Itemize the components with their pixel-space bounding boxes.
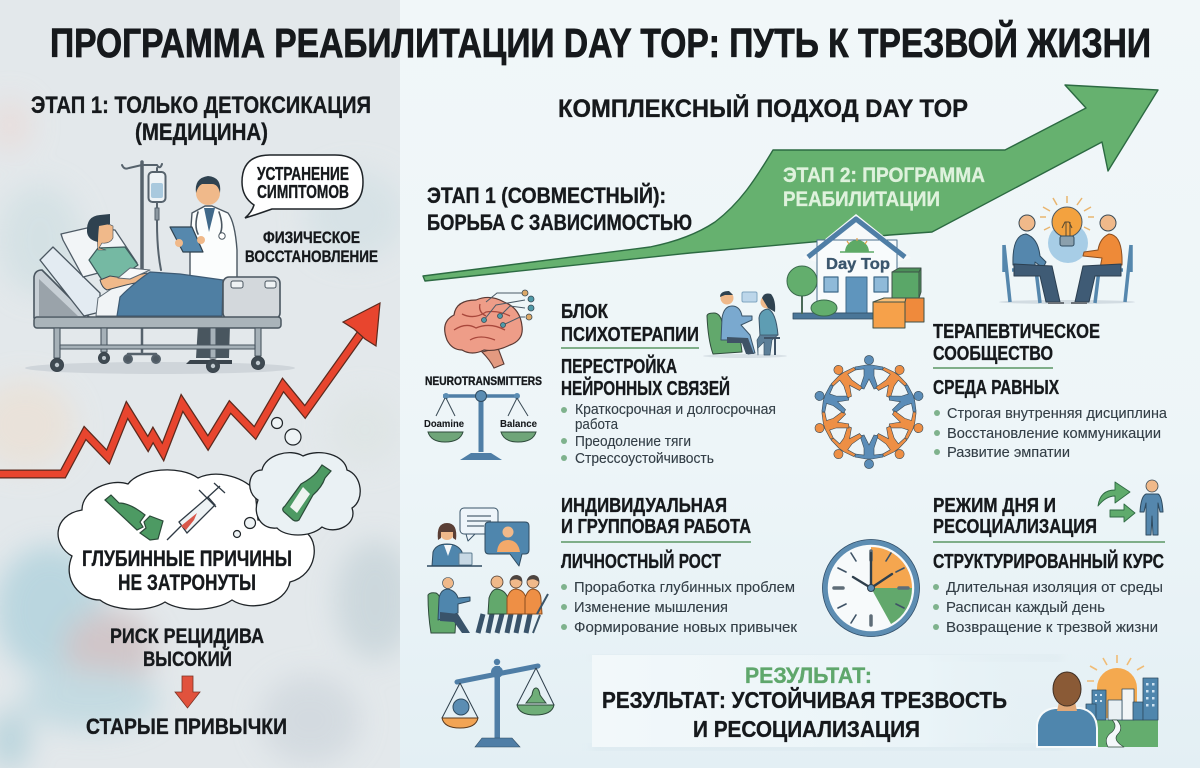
icon: ring of people xyxy=(811,355,927,469)
text: relapse risk: ВЫСОКИЙ xyxy=(143,647,232,671)
icon: brain with circuits xyxy=(445,290,534,368)
bed rail and legs xyxy=(34,317,281,328)
text: old habits: СТАРЫЕ ПРИВЫЧКИ xyxy=(86,714,287,739)
heading: community xyxy=(933,321,1100,365)
result label: РЕЗУЛЬТАТ: xyxy=(745,663,872,688)
icon: balance scale with labels: Balance xyxy=(500,418,537,430)
label: stage 1 joint: БОРЬБА С ЗАВИСИМОСТЬЮ xyxy=(427,210,692,235)
heading: individual and group: И ГРУППОВАЯ РАБОТА xyxy=(561,516,751,538)
callout: symptoms speech bubble xyxy=(242,155,363,218)
heading: individual and group xyxy=(561,495,751,538)
result statement xyxy=(602,686,1007,742)
icon: balance scale with labels xyxy=(424,390,537,460)
icon: person facing city at sunrise xyxy=(1037,655,1158,747)
label: physical recovery xyxy=(245,228,378,266)
bullet list: Восстановление коммуникации xyxy=(947,426,1161,442)
callout: deep causes cloud xyxy=(58,418,360,609)
bed head section xyxy=(34,270,90,318)
heading: routine: РЕСОЦИАЛИЗАЦИЯ xyxy=(933,516,1097,538)
right panel background xyxy=(400,0,1200,768)
icon: balance scale with weights xyxy=(442,659,554,747)
left panel heading xyxy=(31,92,371,146)
bullet list: Строгая внутренняя дисциплина xyxy=(947,406,1168,422)
icon: Day Top house xyxy=(787,214,924,328)
mattress xyxy=(40,247,100,316)
icon: balance scale with labels: Doamine xyxy=(424,418,464,430)
panel: result xyxy=(592,655,1062,749)
footboard xyxy=(223,277,280,319)
label: physical recovery: ФИЗИЧЕСКОЕ xyxy=(263,228,360,247)
heading: psychotherapy: ПСИХОТЕРАПИИ xyxy=(561,324,699,346)
bullet list: Проработка глубинных проблем xyxy=(574,580,795,596)
heading: routine: РЕЖИМ ДНЯ И xyxy=(933,495,1056,517)
online consult xyxy=(427,508,529,566)
bullet list: Возвращение к трезвой жизни xyxy=(946,620,1158,636)
icon: Day Top house: Day Top xyxy=(826,256,890,273)
IV stand xyxy=(122,162,166,363)
callout: symptoms speech bubble: СИМПТОМОВ xyxy=(257,182,349,202)
bullet list xyxy=(933,580,1163,636)
bubbles xyxy=(234,418,301,538)
subheading: neural rewiring: НЕЙРОННЫХ СВЯЗЕЙ xyxy=(561,376,730,400)
section: therapeutic community xyxy=(933,321,1168,461)
bullet list: Изменение мышления xyxy=(574,600,728,616)
subheading: neural rewiring xyxy=(561,354,730,400)
bullet list: Краткосрочная и долгосрочная xyxy=(575,402,776,418)
doctor xyxy=(170,176,237,364)
bullet list: Развитие эмпатии xyxy=(947,445,1070,461)
label: stage 1 joint xyxy=(427,183,692,235)
left panel heading: ЭТАП 1: ТОЛЬКО ДЕТОКСИКАЦИЯ xyxy=(31,92,371,119)
heading: individual and group: ИНДИВИДУАЛЬНАЯ xyxy=(561,495,727,517)
icon: syringe xyxy=(167,483,225,540)
section: individual and group work xyxy=(561,495,798,636)
bullet list: работа xyxy=(575,417,619,433)
blanket xyxy=(117,272,223,316)
bullet list: Длительная изоляция от среды xyxy=(946,580,1163,596)
subheading: neural rewiring: ПЕРЕСТРОЙКА xyxy=(561,354,677,378)
bullet list xyxy=(561,402,776,467)
label: stage 2 program: ЭТАП 2: ПРОГРАММА xyxy=(783,164,985,187)
icon: clock with coloured sectors xyxy=(822,540,920,636)
arrow: down to old habits xyxy=(175,676,200,708)
bullet list: Расписан каждый день xyxy=(946,600,1105,616)
left panel heading: (МЕДИЦИНА) xyxy=(135,119,268,146)
callout: deep causes cloud: ГЛУБИННЫЕ ПРИЧИНЫ xyxy=(82,546,292,571)
illustration: hospital bed, patient, doctor xyxy=(25,162,295,374)
person left xyxy=(1004,215,1064,304)
heading: community: СООБЩЕСТВО xyxy=(933,343,1053,365)
arrow: green growth arrow xyxy=(423,85,1158,281)
label: stage 1 joint: ЭТАП 1 (СОВМЕСТНЫЙ): xyxy=(427,183,666,208)
heading: routine xyxy=(933,495,1097,538)
right panel heading: КОМПЛЕКСНЫЙ ПОДХОД DAY TOP xyxy=(558,93,968,123)
bullet list xyxy=(934,406,1168,461)
heading: psychotherapy: БЛОК xyxy=(561,301,609,323)
result statement: И РЕСОЦИАЛИЗАЦИЯ xyxy=(693,716,920,742)
icon: broken bottle xyxy=(105,495,163,540)
label: physical recovery: ВОССТАНОВЛЕНИЕ xyxy=(245,247,378,266)
bullet list: Преодоление тяги xyxy=(575,434,691,450)
label: stage 2 program: РЕАБИЛИТАЦИИ xyxy=(783,188,940,211)
icon: counselling with lightbulb xyxy=(999,196,1135,304)
subheading: peer environment: СРЕДА РАВНЫХ xyxy=(933,377,1060,399)
icon: therapy session xyxy=(703,291,787,358)
label: stage 2 program xyxy=(783,164,985,211)
bullet list: Формирование новых привычек xyxy=(574,620,798,636)
result statement: РЕЗУЛЬТАТ: УСТОЙЧИВАЯ ТРЕЗВОСТЬ xyxy=(602,686,1007,713)
icon: counsellor and group xyxy=(427,508,548,633)
patient xyxy=(87,214,148,290)
thought bubble: bottle xyxy=(250,453,360,535)
left panel background xyxy=(0,0,415,768)
bullet list xyxy=(561,580,798,636)
label: neurotransmitters: NEUROTRANSMITTERS xyxy=(425,376,542,388)
section: daily routine and resocialization xyxy=(933,495,1165,636)
subheading: personal growth: ЛИЧНОСТНЫЙ РОСТ xyxy=(561,549,721,573)
arrow: zigzag relapse line xyxy=(0,303,380,474)
text: relapse risk: РИСК РЕЦИДИВА xyxy=(110,625,264,648)
heading: psychotherapy xyxy=(561,301,699,346)
callout: symptoms speech bubble: УСТРАНЕНИЕ xyxy=(257,164,349,184)
callout: deep causes cloud: НЕ ЗАТРОНУТЫ xyxy=(118,570,256,595)
text: relapse risk xyxy=(110,625,264,671)
pillow xyxy=(61,228,137,277)
icon: arrows and standing person xyxy=(1098,480,1163,535)
icon: whole bottle xyxy=(283,465,331,521)
group session xyxy=(428,575,548,633)
bullet list: Стрессоустойчивость xyxy=(575,451,714,467)
person right xyxy=(1071,215,1131,304)
heading: community: ТЕРАПЕВТИЧЕСКОЕ xyxy=(933,321,1100,343)
section: psychotherapy block xyxy=(561,301,776,467)
